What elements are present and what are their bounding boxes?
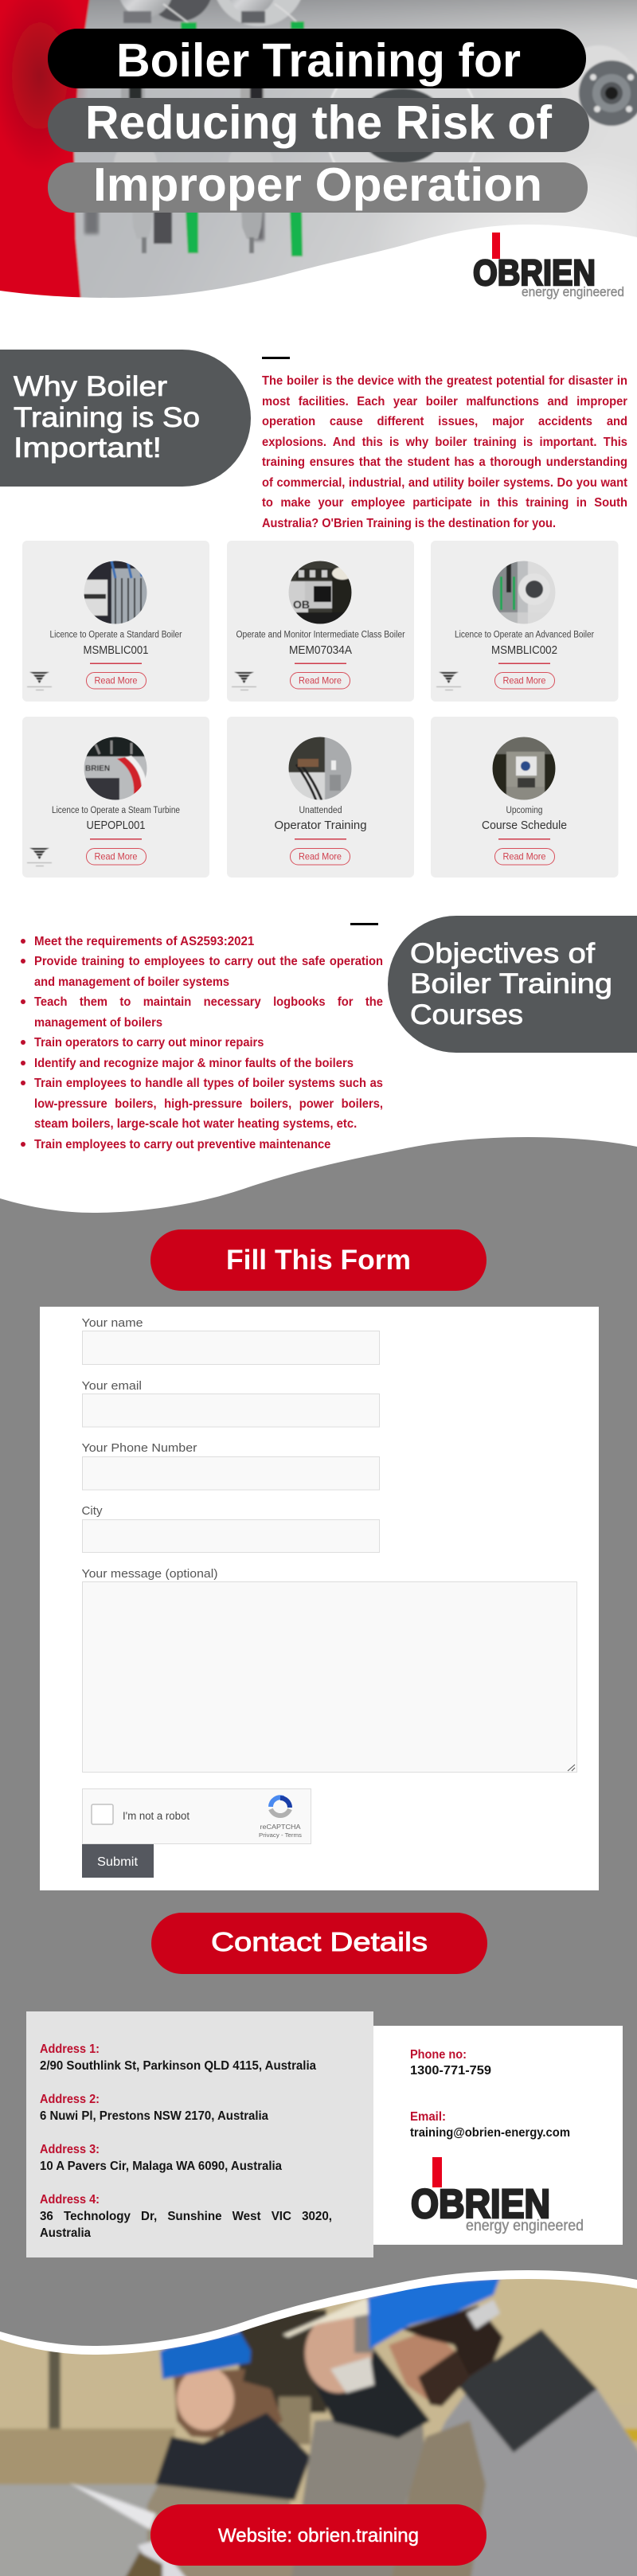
- field: email: Your email: [81, 1379, 142, 1393]
- card 1: MSMBLIC001: Licence to Operate a Standard Boiler: [49, 631, 182, 640]
- card 5: operator training: [227, 717, 414, 878]
- list: objectives of the courses: steam boilers, large-scale hot water heating systems, etc.: [34, 1117, 357, 1131]
- list: objectives of the courses: Meet the requirements of AS2593:2021: [34, 935, 254, 948]
- photo: card 2: OB: [293, 598, 310, 611]
- card 4: UEPOPL001: UEPOPL001: [86, 819, 145, 832]
- card 3: MSMBLIC002: Licence to Operate an Advanced Boiler: [455, 631, 594, 640]
- list: objectives of the courses: Train operators to carry out minor repairs: [34, 1036, 264, 1050]
- photo: card 1: [84, 561, 147, 624]
- logo: O'Brien header: OBRIEN: [473, 252, 596, 293]
- heading panel: why boiler training: Training is So: [14, 402, 200, 433]
- card 2: MEM07034A: [227, 541, 414, 702]
- panel: addresses: Address 3:: [40, 2143, 100, 2156]
- button: fill this form: [150, 1229, 487, 1291]
- heading panel: objectives: Boiler Training: [410, 968, 612, 999]
- field: message: Your message (optional): [81, 1567, 218, 1581]
- recaptcha widget: I'm not a robot: [123, 1810, 190, 1822]
- logo: O'Brien header: [473, 233, 624, 299]
- photo: card 6: [492, 737, 556, 800]
- panel: addresses: 36 Technology Dr, Sunshine West VIC 3020,: [40, 2210, 332, 2223]
- grey background wave: [0, 1137, 637, 2389]
- text block: why boiler training paragraph: to make your employee participate in this training in South: [262, 496, 627, 510]
- recaptcha widget: Privacy - Terms: [259, 1831, 302, 1839]
- heading panel: objectives: Objectives of: [410, 938, 595, 969]
- heading panel: why boiler training: Important!: [14, 432, 162, 463]
- logo: O'Brien header: energy engineered: [522, 285, 624, 299]
- field: city: City: [81, 1504, 103, 1518]
- title pill 1: [48, 29, 586, 88]
- footer photo: three workers with hard hats: [0, 2269, 637, 2576]
- text block: why boiler training paragraph: of commercial, industrial, and utility boiler systems. Do you want: [262, 476, 627, 490]
- field: name: [81, 1316, 379, 1365]
- field: email: [81, 1379, 379, 1427]
- heading panel: why boiler training: Why Boiler: [14, 371, 167, 402]
- card 1: MSMBLIC001: MSMBLIC001: [83, 643, 148, 657]
- title pill 2: Reducing the Risk of: [85, 96, 552, 149]
- text block: why boiler training paragraph: operation cause different issues, major accidents and: [262, 415, 627, 428]
- logo: O'Brien contact: energy engineered: [466, 2218, 584, 2234]
- text: email: training@obrien-energy.com: [410, 2126, 570, 2140]
- field: phone: Your Phone Number: [81, 1441, 197, 1455]
- list: objectives of the courses: Teach them to maintain necessary logbooks for the: [34, 995, 383, 1009]
- logo: O'Brien contact: OBRIEN: [411, 2181, 550, 2226]
- photo: card 4: BRIEN: [85, 764, 110, 773]
- card 6: course schedule: Course Schedule: [482, 819, 567, 832]
- field: message: [81, 1567, 576, 1773]
- card 5: operator training: Read More: [299, 850, 342, 862]
- panel: addresses: Address 2:: [40, 2093, 100, 2106]
- text block: why boiler training paragraph: Australia? O'Brien Training is the destination for you.: [262, 517, 556, 530]
- card 4: UEPOPL001: Read More: [94, 850, 138, 862]
- card 4: UEPOPL001: Licence to Operate a Steam Turbine: [52, 806, 180, 815]
- text block: why boiler training paragraph: training ensures that the student has a thorough understanding: [262, 455, 627, 469]
- card 3: MSMBLIC002: Read More: [503, 675, 546, 686]
- text: email: [410, 2110, 570, 2140]
- text block: why boiler training paragraph: explosions. And this is why boiler training is important. This: [262, 436, 627, 449]
- card 6: course schedule: Read More: [503, 850, 546, 862]
- card 2: MEM07034A: Operate and Monitor Intermediate Class Boiler: [236, 631, 405, 640]
- card 2: MEM07034A: MEM07034A: [289, 643, 352, 657]
- logo: O'Brien contact: [411, 2157, 584, 2234]
- heading panel: objectives: Courses: [410, 999, 523, 1030]
- photo: card 3: [492, 561, 556, 624]
- list: objectives of the courses: Train employees to carry out preventive maintenance: [34, 1138, 330, 1151]
- card 6: course schedule: [431, 717, 618, 878]
- field: phone: [81, 1441, 379, 1490]
- button: website: Website: obrien.training: [218, 2525, 419, 2547]
- panel: form: [40, 1307, 599, 1890]
- heading panel: why boiler training: [0, 350, 251, 487]
- photo: card 5: [288, 737, 352, 800]
- text block: why boiler training paragraph: The boiler is the device with the greatest potential for disaster in: [262, 374, 627, 388]
- text: email: Email:: [410, 2110, 446, 2124]
- list: objectives of the courses: Identify and recognize major & minor faults of the boilers: [34, 1057, 354, 1070]
- recaptcha widget: [83, 1788, 311, 1844]
- list: objectives of the courses: Provide training to employees to carry out the safe operation: [34, 955, 383, 968]
- panel: addresses: 10 A Pavers Cir, Malaga WA 6090, Australia: [40, 2160, 282, 2173]
- text: phone: 1300-771-759: [410, 2064, 491, 2078]
- text: phone: [410, 2048, 491, 2078]
- card 5: operator training: Operator Training: [274, 819, 366, 832]
- field: name: Your name: [81, 1316, 143, 1330]
- list: objectives of the courses: Train employees to handle all types of boiler systems such as: [34, 1077, 383, 1090]
- card 3: MSMBLIC002: MSMBLIC002: [491, 643, 557, 657]
- panel: addresses: [26, 2011, 373, 2257]
- button: submit: [82, 1844, 154, 1878]
- icon: recaptcha: [271, 1797, 290, 1816]
- button: submit: Submit: [97, 1855, 139, 1869]
- text block: why boiler training paragraph: most facilities. Each year boiler malfunctions and improper: [262, 395, 627, 408]
- card 4: UEPOPL001: [22, 717, 209, 878]
- panel: addresses: 2/90 Southlink St, Parkinson QLD 4115, Australia: [40, 2059, 316, 2073]
- hero photo: boiler panel: [0, 0, 637, 307]
- list: objectives of the courses: low-pressure boilers, high-pressure boilers, power boilers,: [34, 1097, 383, 1111]
- card 1: MSMBLIC001: Read More: [94, 675, 138, 686]
- panel: addresses: Australia: [40, 2226, 91, 2240]
- list: objectives of the courses: and management of boiler systems: [34, 975, 229, 989]
- title pill 3: Improper Operation: [93, 158, 542, 211]
- card 5: operator training: Unattended: [299, 806, 342, 815]
- field: city: [81, 1504, 379, 1553]
- panel: addresses: Address 4:: [40, 2193, 100, 2207]
- panel: addresses: 6 Nuwi Pl, Prestons NSW 2170, Australia: [40, 2109, 268, 2123]
- button: contact details: [151, 1913, 487, 1974]
- button: contact details: Contact Details: [211, 1927, 428, 1956]
- button: fill this form: Fill This Form: [226, 1245, 411, 1276]
- heading panel: objectives: [388, 916, 637, 1053]
- list: objectives of the courses: [21, 935, 383, 1151]
- title pill 1: Boiler Training for: [116, 34, 521, 87]
- text: phone: Phone no:: [410, 2048, 467, 2062]
- panel: phone, email and logo: [373, 2026, 623, 2245]
- button: website: [150, 2504, 487, 2566]
- card 2: MEM07034A: Read More: [299, 675, 342, 686]
- card 1: MSMBLIC001: [22, 541, 209, 702]
- card 6: course schedule: Upcoming: [506, 806, 543, 815]
- photo: card 4: [84, 737, 147, 800]
- panel: addresses: Address 1:: [40, 2042, 100, 2056]
- list: objectives of the courses: management of boilers: [34, 1016, 162, 1030]
- photo: card 2: [288, 561, 353, 624]
- text block: why boiler training paragraph: [262, 374, 627, 530]
- card 3: MSMBLIC002: [431, 541, 618, 702]
- recaptcha widget: reCAPTCHA: [260, 1824, 301, 1831]
- footer white wave: [0, 2270, 637, 2576]
